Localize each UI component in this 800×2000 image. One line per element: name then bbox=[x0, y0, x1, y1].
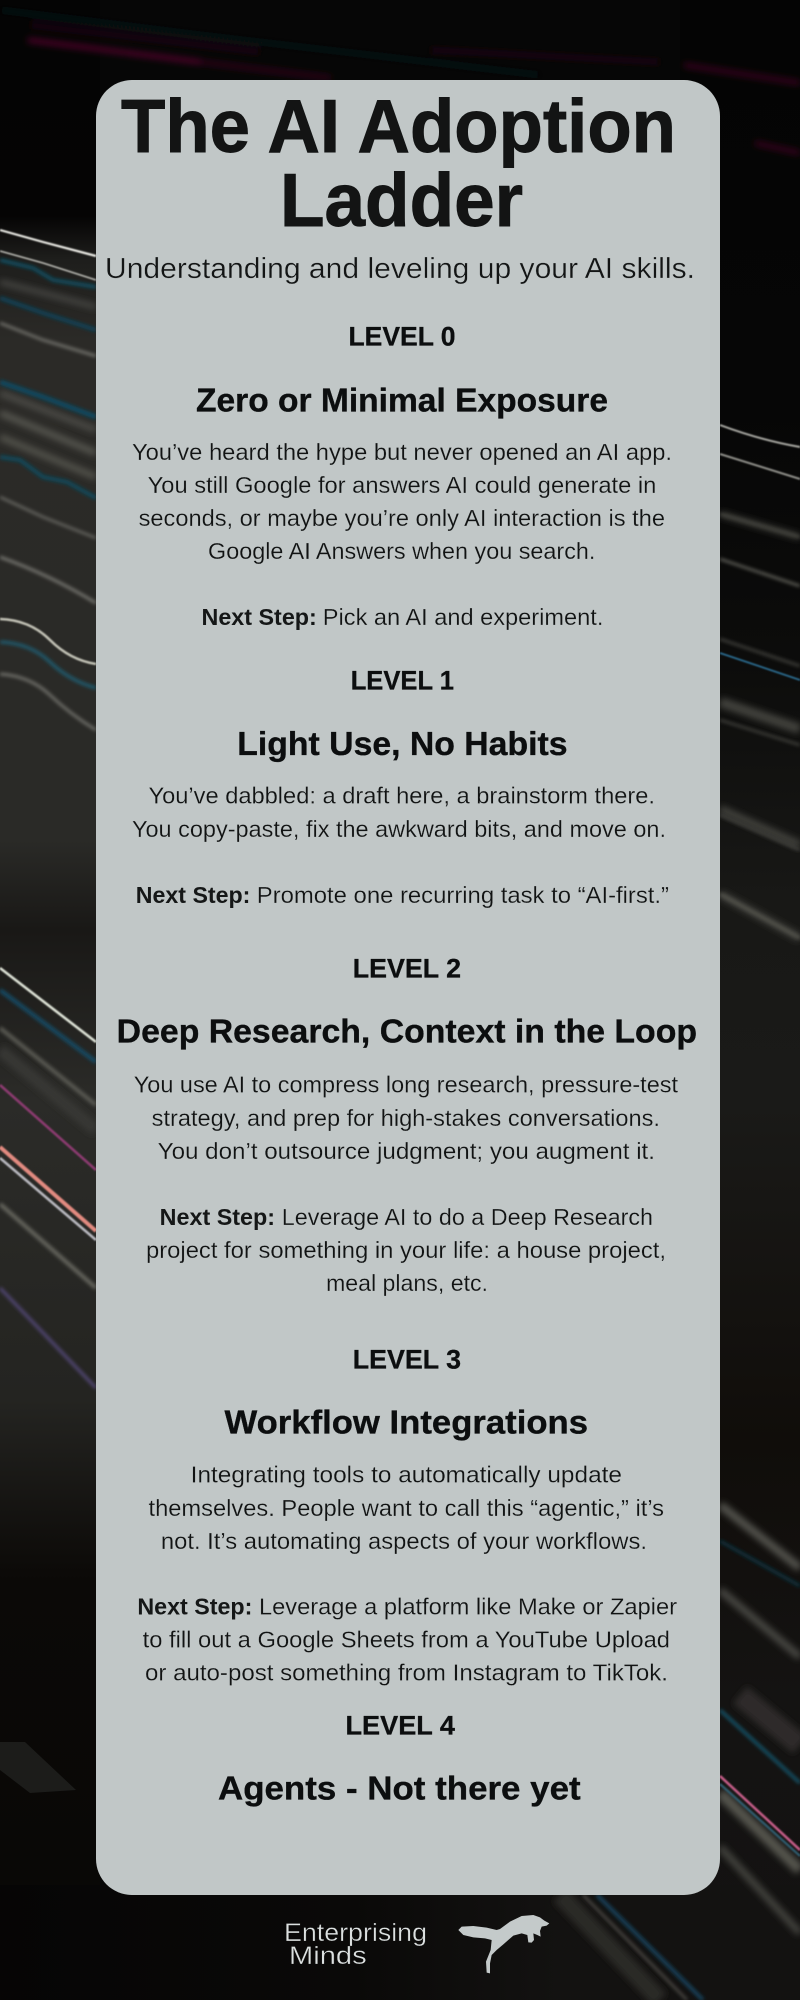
level 3 next step: Leverage a platform like Make or Zapier bbox=[259, 1594, 677, 1620]
section: level 2 bbox=[117, 954, 697, 1296]
level 1 label: LEVEL 1 bbox=[351, 666, 454, 696]
level 2 next step: Leverage AI to do a Deep Research bbox=[282, 1204, 653, 1230]
level 1 heading: Light Use, No Habits bbox=[237, 725, 568, 762]
level 0 heading: Zero or Minimal Exposure bbox=[196, 382, 608, 419]
section: level 3 bbox=[137, 1344, 677, 1686]
level 1 next step: Promote one recurring task to “AI-first.” bbox=[257, 882, 669, 908]
level 2 description: You use AI to compress long research, pressure-test bbox=[134, 1072, 679, 1098]
level 3 description: Integrating tools to automatically update bbox=[191, 1462, 622, 1488]
level 2 next step bbox=[146, 1204, 666, 1296]
level 2 description: You don’t outsource judgment; you augment it. bbox=[158, 1138, 655, 1164]
level 2 description bbox=[134, 1072, 679, 1164]
title: The AI Adoption bbox=[121, 84, 676, 168]
level 2 description: strategy, and prep for high-stakes conversations. bbox=[152, 1105, 660, 1131]
level 3 description: not. It’s automating aspects of your workflows. bbox=[161, 1528, 647, 1554]
level 0 description: You still Google for answers AI could generate in bbox=[148, 472, 656, 498]
footer brand wordmark: Minds bbox=[289, 1942, 367, 1970]
level 3 next step: to fill out a Google Sheets from a YouTube Upload bbox=[143, 1627, 670, 1653]
level 3 description bbox=[148, 1462, 664, 1554]
footer brand wordmark: Enterprising bbox=[284, 1919, 427, 1947]
level 0 description: Google AI Answers when you search. bbox=[208, 538, 595, 564]
footer brand wordmark bbox=[284, 1919, 427, 1970]
level 0 next step bbox=[202, 604, 603, 630]
level 3 next step: or auto-post something from Instagram to TikTok. bbox=[145, 1660, 668, 1686]
level 0 description: You’ve heard the hype but never opened an AI app. bbox=[132, 439, 672, 465]
icon: leaping fox logo bbox=[458, 1915, 549, 1973]
level 2 next step: meal plans, etc. bbox=[326, 1270, 488, 1296]
level 3 next step bbox=[137, 1594, 677, 1686]
level 3 next step: Next Step: bbox=[137, 1594, 252, 1620]
level 1 next step: Next Step: bbox=[136, 882, 250, 908]
level 0 next step: Next Step: bbox=[202, 604, 317, 630]
section: level 4 bbox=[218, 1710, 581, 1806]
section: level 1 bbox=[132, 666, 669, 908]
title: Ladder bbox=[280, 158, 523, 242]
level 4 heading: Agents - Not there yet bbox=[218, 1769, 581, 1806]
subtitle: Understanding and leveling up your AI skills. bbox=[105, 253, 695, 285]
title bbox=[121, 84, 676, 242]
level 3 description: themselves. People want to call this “agentic,” it’s bbox=[148, 1495, 664, 1521]
level 0 description bbox=[132, 439, 672, 564]
level 2 next step: project for something in your life: a house project, bbox=[146, 1237, 666, 1263]
level 1 description: You copy-paste, fix the awkward bits, and move on. bbox=[132, 816, 666, 842]
panel: main ladder card bbox=[96, 80, 720, 1895]
level 0 next step: Pick an AI and experiment. bbox=[323, 604, 603, 630]
level 4 label: LEVEL 4 bbox=[346, 1710, 455, 1740]
level 2 next step: Next Step: bbox=[160, 1204, 275, 1230]
level 1 description: You’ve dabbled: a draft here, a brainstorm there. bbox=[148, 782, 655, 808]
level 0 label: LEVEL 0 bbox=[348, 322, 456, 352]
level 3 label: LEVEL 3 bbox=[353, 1344, 461, 1374]
level 3 heading: Workflow Integrations bbox=[224, 1404, 588, 1440]
level 0 description: seconds, or maybe you’re only AI interaction is the bbox=[139, 505, 665, 531]
level 2 heading: Deep Research, Context in the Loop bbox=[117, 1012, 697, 1049]
section: level 0 bbox=[132, 322, 672, 630]
level 2 label: LEVEL 2 bbox=[353, 954, 461, 984]
level 1 description bbox=[132, 782, 666, 842]
